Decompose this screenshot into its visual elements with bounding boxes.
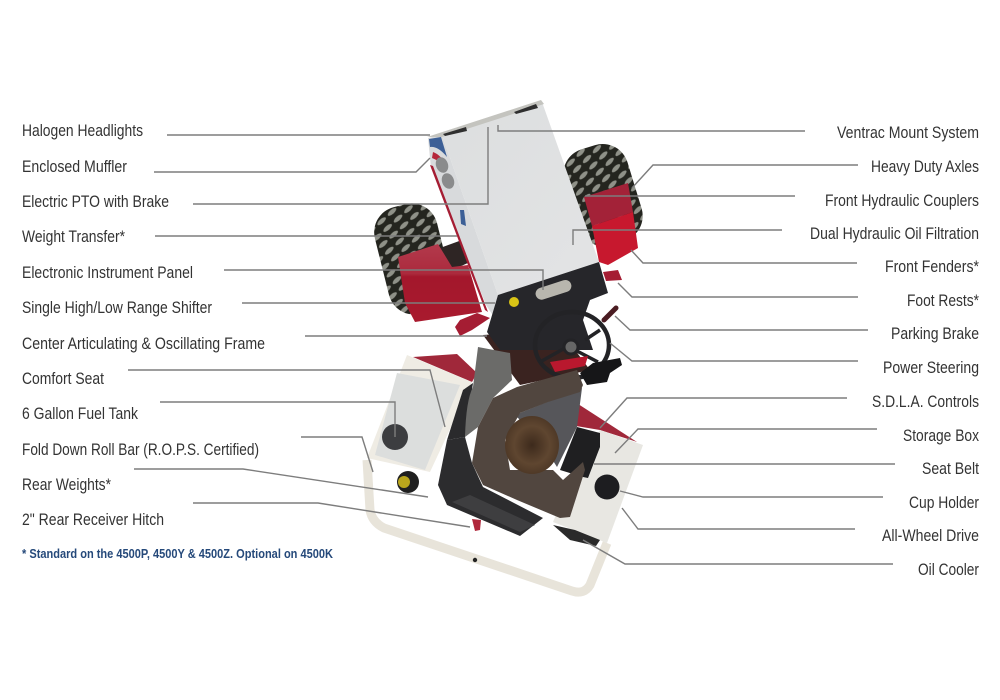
callout: Comfort Seat: Comfort Seat (22, 370, 104, 388)
hood front edge (427, 100, 544, 137)
callout: Fold Down Roll Bar (22, 437, 373, 472)
driver jacket (472, 370, 585, 518)
callout: Center Articulating and Oscillating Frame: Center Articulating & Oscillating Frame (22, 335, 265, 353)
right fender (584, 183, 638, 265)
dash panel (487, 262, 608, 350)
hitch (472, 519, 481, 531)
left fender (398, 244, 482, 322)
callout: Enclosed Muffler: Enclosed Muffler (22, 158, 127, 176)
callout: Power Steering (610, 343, 979, 377)
armrest (560, 427, 600, 478)
callout: Rear Weights (22, 469, 428, 497)
vehicle: top view of tractor with driver (367, 100, 649, 592)
fuel cap (382, 424, 408, 450)
callout: Ventrac Mount System (498, 124, 979, 142)
left foot rest (455, 313, 490, 336)
oil cooler (553, 525, 600, 546)
right rear box (storage) (553, 430, 643, 543)
callout: Fold Down Roll Bar: Fold Down Roll Bar (R.O.P.S. Certified) (22, 441, 259, 459)
callout: Rear Weights: Rear Weights* (22, 476, 111, 494)
driver lap (515, 388, 582, 467)
callout: Electronic Instrument Panel (22, 264, 543, 290)
callout: Front Fenders: Front Fenders* (885, 258, 979, 276)
callout: Foot Rests: Foot Rests* (907, 292, 979, 310)
callout: 2 inch Rear Receiver Hitch (22, 503, 470, 529)
callout: 6 Gallon Fuel Tank: 6 Gallon Fuel Tank (22, 405, 139, 423)
callout: Ventrac Mount System: Ventrac Mount System (837, 124, 979, 142)
front left tire (369, 198, 457, 320)
driver legs (465, 347, 512, 437)
callout: Heavy Duty Axles (632, 158, 979, 188)
footnote: * Standard on the 4500P, 4500Y & 4500Z. Optional on 4500K (22, 547, 333, 561)
callout: Parking Brake (615, 316, 979, 343)
callout: Oil Cooler: Oil Cooler (918, 561, 979, 579)
hood (442, 102, 599, 295)
left rear box (fuel tank) (367, 355, 472, 472)
callout: 2 inch Rear Receiver Hitch: 2" Rear Receiver Hitch (22, 511, 164, 529)
callout: Single High/Low Range Shifter: Single High/Low Range Shifter (22, 299, 212, 317)
left rear red panel (413, 354, 477, 382)
callout: Storage Box (615, 427, 980, 453)
callout: Electronic Instrument Panel: Electronic Instrument Panel (22, 264, 193, 282)
callout: Power Steering: Power Steering (883, 359, 979, 377)
yellow dash button (509, 297, 519, 307)
callout: Seat Belt: Seat Belt (922, 460, 979, 478)
left axle (440, 240, 470, 272)
driver head (505, 416, 559, 474)
red belt under wheel (550, 356, 588, 372)
callout: All-Wheel Drive (622, 508, 979, 545)
callout: All-Wheel Drive: All-Wheel Drive (882, 527, 979, 545)
front right tire (557, 138, 649, 252)
callout: Halogen Headlights: Halogen Headlights (22, 122, 143, 140)
roll bar (367, 460, 607, 592)
seat (438, 383, 543, 536)
callout: Cup Holder: Cup Holder (909, 494, 979, 512)
callout: Dual Hydraulic Oil Filtration (573, 225, 979, 245)
callout: S.D.L.A. Controls: S.D.L.A. Controls (872, 393, 979, 411)
callout: Comfort Seat (22, 370, 445, 427)
callout: Foot Rests (618, 283, 979, 310)
glove (580, 358, 622, 385)
foot rest right (603, 270, 622, 281)
rear weight (397, 471, 419, 493)
instrument display (534, 278, 573, 301)
callout: Front Fenders (631, 250, 979, 276)
hood side strip (428, 135, 498, 323)
cup holder (594, 474, 620, 500)
right rear red panel (570, 402, 637, 442)
driver floor (483, 330, 590, 385)
callout: Enclosed Muffler (22, 158, 430, 176)
callout: 6 Gallon Fuel Tank (22, 402, 395, 437)
callout: Oil Cooler (583, 540, 979, 579)
hitch hole (473, 558, 477, 562)
callout: Weight Transfer: Weight Transfer* (22, 228, 125, 246)
callout: Electric PTO with Brake (22, 127, 488, 211)
callout: Storage Box: Storage Box (903, 427, 980, 445)
callout: S.D.L.A. Controls (600, 393, 979, 428)
callout: Heavy Duty Axles: Heavy Duty Axles (871, 158, 979, 176)
steering wheel (535, 312, 609, 378)
callout: Electric PTO with Brake: Electric PTO with Brake (22, 193, 169, 211)
parking brake lever (604, 308, 616, 320)
callout: Cup Holder (620, 491, 979, 512)
callout: Parking Brake: Parking Brake (891, 325, 979, 343)
